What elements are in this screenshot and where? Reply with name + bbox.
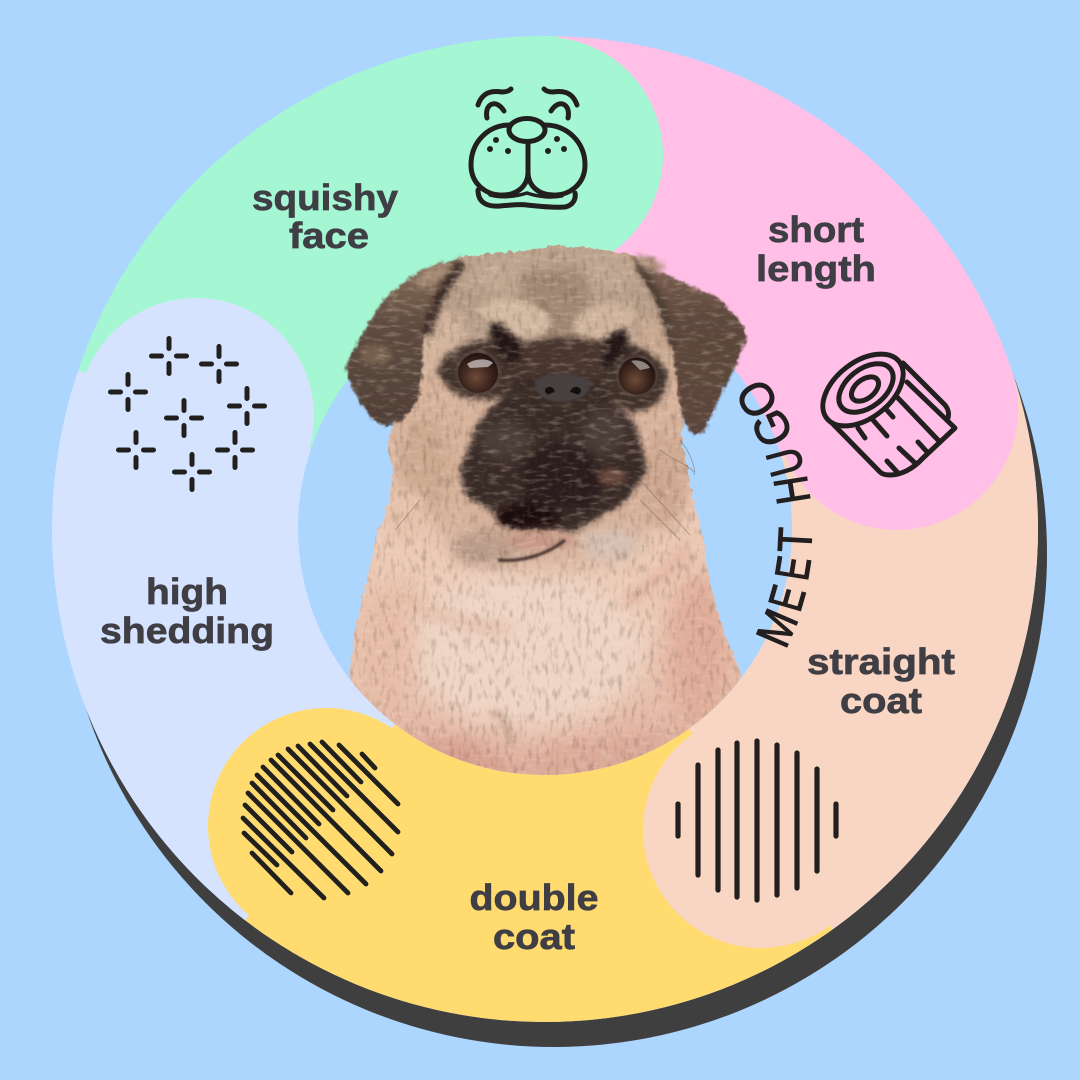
curved title: MEET HUGO: O	[725, 370, 789, 428]
dog body and head silhouette	[349, 244, 742, 775]
curved title: MEET HUGO: U	[756, 442, 815, 482]
segment: squishy face	[78, 36, 557, 449]
icon: vertical straight coat lines	[678, 741, 836, 900]
left eye	[455, 350, 501, 396]
icon: diagonal double coat lines	[243, 742, 398, 898]
furry coat layers	[344, 244, 748, 775]
whiskers	[395, 440, 695, 540]
right eye	[616, 355, 658, 397]
dark muzzle	[460, 378, 648, 551]
label: double coat: double	[470, 877, 598, 918]
label: squishy face: face	[289, 215, 369, 256]
nose	[535, 374, 590, 402]
right ear	[630, 254, 747, 435]
label: squishy face: squishy	[252, 177, 398, 218]
label: high shedding: high	[146, 571, 228, 612]
curved title: MEET HUGO: E	[764, 552, 821, 584]
label: short length: length	[756, 248, 876, 289]
dark mask around eyes	[437, 322, 667, 412]
head: yellow	[208, 708, 392, 916]
segment: straight coat	[689, 385, 1038, 930]
head: mint	[552, 38, 663, 252]
icon: measuring tape	[810, 340, 955, 475]
left ear	[345, 257, 463, 427]
curved title: MEET HUGO	[725, 370, 823, 654]
curved title: MEET HUGO: H	[765, 472, 821, 508]
label: double coat: coat	[493, 916, 575, 957]
label: squishy face	[252, 177, 398, 256]
segment: high shedding	[52, 370, 395, 920]
label: short length: short	[768, 209, 864, 250]
curved title: MEET HUGO: E	[758, 579, 816, 616]
label: straight coat: coat	[840, 680, 922, 721]
pug photo illustration	[344, 244, 748, 775]
segment: double coat	[245, 724, 833, 1022]
label: double coat	[470, 877, 598, 957]
label: high shedding	[100, 571, 274, 651]
curved title: MEET HUGO: T	[769, 526, 823, 554]
label: straight coat	[807, 641, 955, 721]
label: high shedding: shedding	[100, 610, 274, 651]
curved title: MEET HUGO: G	[740, 401, 804, 455]
chin crease	[498, 540, 565, 560]
head: lavender	[86, 298, 314, 448]
curved title: MEET HUGO: M	[747, 602, 809, 654]
head: pink	[785, 386, 1018, 530]
icon: pug face outline	[471, 89, 585, 207]
segment: short length	[557, 36, 1016, 456]
head: peach	[643, 734, 830, 948]
label: short length	[756, 209, 876, 289]
icon: sparkle shedding hairs	[110, 338, 264, 490]
label: straight coat: straight	[807, 641, 955, 682]
